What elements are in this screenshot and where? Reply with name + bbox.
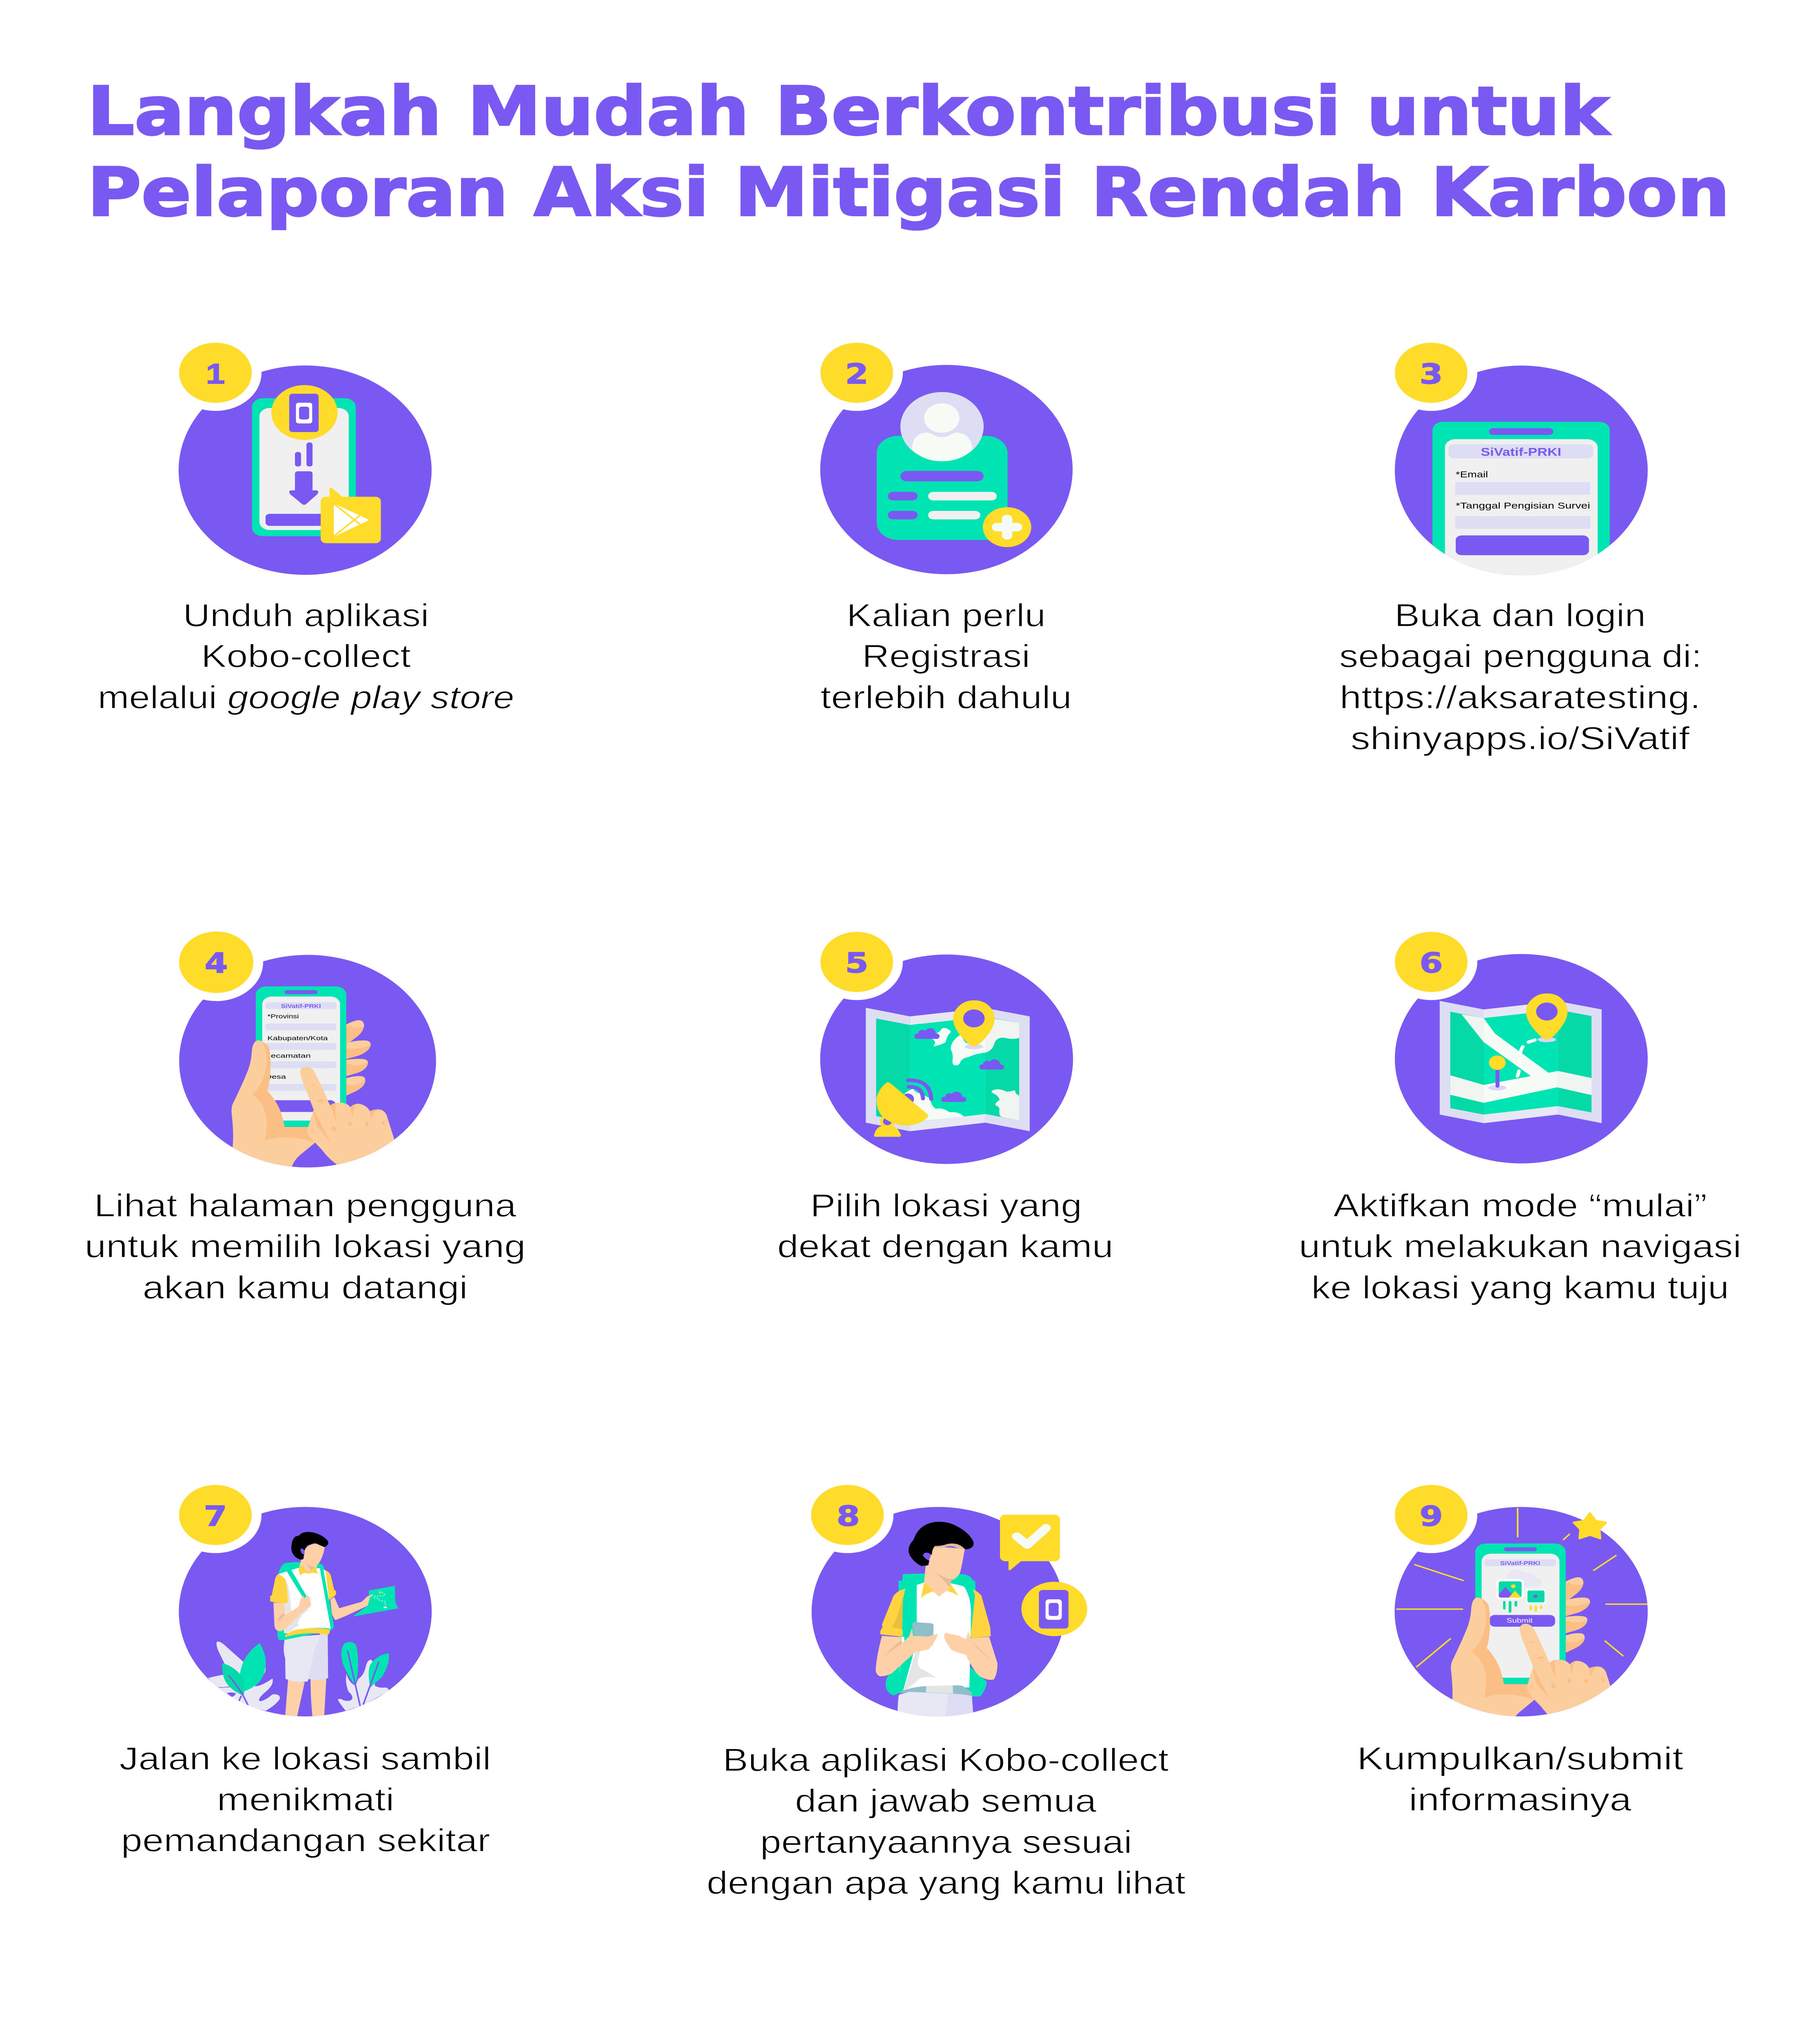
text: step 6: untuk melakukan navigasi <box>1299 1228 1741 1264</box>
text: step 3: shinyapps.io/SiVatif <box>1350 721 1690 756</box>
text: step 7 <box>120 1741 491 1858</box>
number badge 6: 6 <box>1419 947 1443 979</box>
panel: step 8 <box>707 1477 1186 1901</box>
text: step 8 <box>707 1742 1186 1901</box>
number badge 4 <box>169 923 263 1001</box>
icon: person with phone answering questions <box>811 1507 1087 1718</box>
text: step 3: Buka dan login <box>1394 598 1646 633</box>
number badge 8: 8 <box>836 1500 860 1532</box>
icon: map with route navigation <box>1395 954 1648 1164</box>
panel: step 9 <box>1357 1477 1683 1817</box>
text: step 1 <box>98 598 514 715</box>
text: step 1: Kobo-collect <box>201 639 411 674</box>
panel: step 6 <box>1299 924 1741 1306</box>
text: step 3: https://aksaratesting. <box>1340 680 1700 715</box>
icon: hands holding phone with location form: SiVatif-PRKI <box>281 1003 321 1009</box>
text: step 3: sebagai pengguna di: <box>1339 639 1702 674</box>
number badge 9 <box>1385 1477 1477 1553</box>
icon: hands tapping submit on phone: SiVatif-PRKI <box>1500 1560 1540 1566</box>
icon: login form phone: *Tanggal Pengisian Survei <box>1456 501 1590 511</box>
icon: phone download from play store <box>179 366 432 575</box>
panel: step 7 <box>120 1477 491 1858</box>
text: step 5 <box>777 1188 1113 1264</box>
title: Langkah Mudah Berkontribusi untuk <box>87 72 1611 150</box>
icon: hands holding phone with location form: *Provinsi <box>268 1013 299 1020</box>
text: step 7: pemandangan sekitar <box>121 1823 490 1858</box>
panel: step 4 <box>85 923 526 1306</box>
icon: hands holding phone with location form: Desa <box>265 1073 286 1080</box>
title <box>87 72 1730 231</box>
number badge 1: 1 <box>206 358 225 390</box>
text: step 5: dekat dengan kamu <box>777 1228 1113 1264</box>
number badge 7 <box>169 1477 262 1553</box>
text: step 9: informasinya <box>1409 1782 1632 1817</box>
text: step 7: menikmati <box>217 1782 394 1817</box>
number badge 3 <box>1385 335 1477 411</box>
icon: hands tapping submit on phone <box>1394 1507 1648 1725</box>
text: step 8: pertanyaannya sesuai <box>760 1824 1132 1860</box>
text: step 1: melalui google play store <box>98 680 514 715</box>
icon: login form phone: SiVatif-PRKI <box>1481 446 1561 458</box>
number badge 5 <box>811 924 903 1000</box>
text: step 2: Kalian perlu <box>847 598 1046 633</box>
text: step 6: ke lokasi yang kamu tuju <box>1311 1270 1729 1306</box>
text: step 5: Pilih lokasi yang <box>810 1188 1082 1224</box>
icon: registration card <box>820 365 1073 574</box>
number badge 1 <box>169 335 262 411</box>
text: step 1: Unduh aplikasi <box>183 598 429 633</box>
text: step 7: Jalan ke lokasi sambil <box>120 1741 491 1776</box>
text: step 4: untuk memilih lokasi yang <box>85 1228 526 1264</box>
text: step 3 <box>1339 598 1702 756</box>
text: step 2: Registrasi <box>862 639 1030 674</box>
number badge 6 <box>1385 924 1477 1000</box>
icon: traveller walking with map among plants <box>179 1507 432 1717</box>
icon: login form phone: *Email <box>1456 470 1488 479</box>
text: step 8: Buka aplikasi Kobo-collect <box>723 1742 1168 1778</box>
number badge 4: 4 <box>204 947 228 979</box>
panel: step 1 <box>98 335 514 715</box>
text: step 8: dengan apa yang kamu lihat <box>707 1865 1186 1901</box>
text: step 9: Kumpulkan/submit <box>1357 1741 1683 1776</box>
text: step 4: Lihat halaman pengguna <box>94 1188 517 1224</box>
number badge 5: 5 <box>845 947 869 979</box>
text: step 6: Aktifkan mode “mulai” <box>1333 1188 1707 1224</box>
icon: hands holding phone with location form <box>179 955 436 1168</box>
panel: step 2 <box>811 335 1073 715</box>
panel: step 5 <box>777 924 1113 1264</box>
number badge 3: 3 <box>1419 358 1443 390</box>
text: step 8: dan jawab semua <box>795 1783 1097 1819</box>
icon: hands tapping submit on phone: Submit <box>1507 1616 1533 1624</box>
icon: folded map with pin and satellite dish <box>820 954 1073 1164</box>
number badge 7: 7 <box>204 1500 227 1532</box>
panel: step 3 <box>1339 335 1702 756</box>
text: step 2: terlebih dahulu <box>820 680 1072 715</box>
icon: login form phone <box>1395 366 1648 586</box>
icon: hands holding phone with location form: Kabupaten/Kota <box>268 1035 328 1042</box>
number badge 9: 9 <box>1419 1500 1443 1532</box>
text: step 4: akan kamu datangi <box>142 1270 468 1306</box>
text: step 9 <box>1357 1741 1683 1817</box>
text: step 4 <box>85 1188 526 1306</box>
number badge 8 <box>801 1477 893 1553</box>
icon: hands holding phone with location form: Kecamatan <box>265 1052 311 1059</box>
number badge 2 <box>811 335 903 411</box>
number badge 2: 2 <box>845 358 869 390</box>
text: step 2 <box>820 598 1072 715</box>
text: step 6 <box>1299 1188 1741 1306</box>
